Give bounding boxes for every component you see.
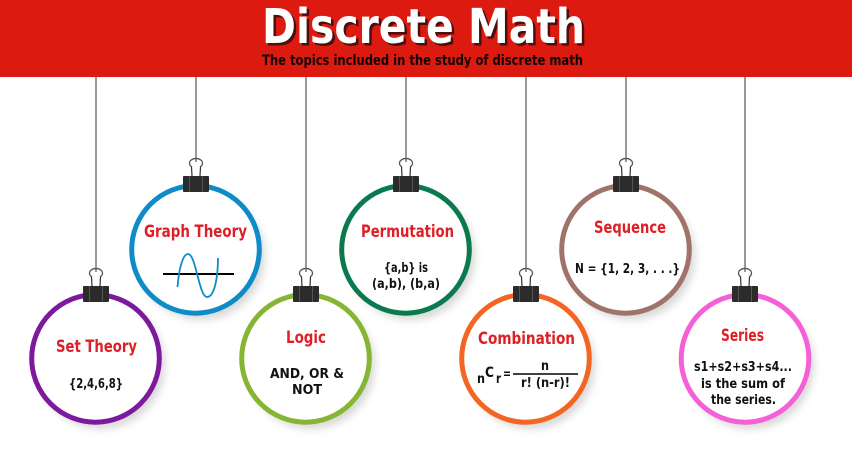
- ornament: Logic: [242, 77, 375, 429]
- title banner: [0, 0, 852, 77]
- formula: C: [485, 365, 494, 381]
- ornament: Set Theory: Set Theory: [56, 337, 137, 356]
- ornament: Permutation: [342, 77, 475, 320]
- ornament: Series: s1+s2+s3+s4...: [694, 359, 792, 375]
- ornament: Logic: NOT: [292, 382, 323, 398]
- title: Discrete Math: [264, 2, 588, 58]
- ornament: Sequence: N = {1, 2, 3, . . .}: [575, 261, 680, 277]
- ornament: Set Theory: {2,4,6,8}: [69, 376, 123, 392]
- formula: n: [541, 358, 549, 374]
- ornament: Permutation: (a,b), (b,a): [372, 276, 440, 292]
- ornament: Series: Series: [721, 326, 764, 345]
- title: Discrete Math: [262, 0, 585, 55]
- formula: r: [496, 371, 501, 387]
- ornament: Series: the series.: [711, 392, 776, 408]
- formula: r! (n-r)!: [521, 375, 570, 391]
- ornament: Logic: AND, OR &: [270, 366, 344, 382]
- ornament: Logic: Logic: [286, 328, 326, 347]
- ornament: Permutation: Permutation: [361, 222, 454, 241]
- ornament: Set Theory: [32, 77, 165, 429]
- ornament: Sequence: [562, 77, 695, 320]
- ornament: Series: is the sum of: [701, 376, 785, 392]
- ornament: Graph Theory: Graph Theory: [144, 222, 247, 241]
- ornament: Permutation: {a,b} is: [384, 260, 428, 276]
- subtitle: The topics included in the study of discrete math: [262, 53, 583, 69]
- ornament: Combination: [462, 77, 595, 429]
- formula: [477, 358, 578, 391]
- ornament: Series: [681, 77, 814, 429]
- ornament: Combination: Combination: [478, 329, 575, 348]
- ornament: Sequence: Sequence: [594, 218, 666, 237]
- icon: sine wave graph: [163, 254, 234, 297]
- formula: n: [477, 371, 485, 387]
- formula: =: [503, 366, 511, 382]
- ornament: Graph Theory: [132, 77, 265, 320]
